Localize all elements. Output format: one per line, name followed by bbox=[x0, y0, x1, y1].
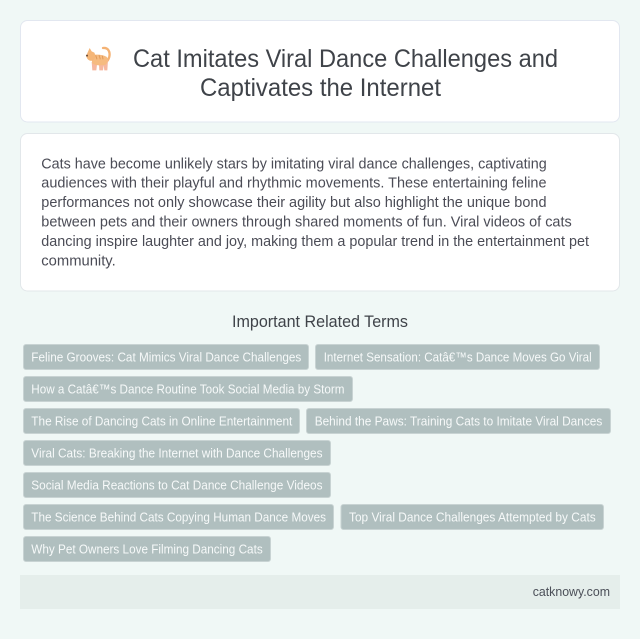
tag: The Science Behind Cats Copying Human Dance Moves bbox=[31, 510, 326, 524]
tag bbox=[24, 472, 330, 498]
description text: performances not only showcase their agility but also highlight the unique bond bbox=[41, 195, 547, 211]
tag: Social Media Reactions to Cat Dance Challenge Videos bbox=[31, 478, 323, 492]
tag: Internet Sensation: Catâ€™s Dance Moves Go Viral bbox=[324, 350, 592, 364]
panel: title card bbox=[20, 20, 620, 122]
tag bbox=[24, 344, 308, 370]
tag bbox=[24, 376, 352, 402]
tag bbox=[341, 504, 604, 530]
description text bbox=[41, 156, 589, 269]
tag: Why Pet Owners Love Filming Dancing Cats bbox=[31, 542, 263, 556]
tag: Viral Cats: Breaking the Internet with Dance Challenges bbox=[31, 446, 323, 460]
tag: Top Viral Dance Challenges Attempted by Cats bbox=[349, 510, 596, 524]
tag: The Rise of Dancing Cats in Online Entertainment bbox=[31, 414, 293, 428]
tag: How a Catâ€™s Dance Routine Took Social Media by Storm bbox=[31, 382, 345, 396]
footer bbox=[20, 575, 620, 609]
tag bbox=[24, 536, 270, 562]
description text: community. bbox=[41, 253, 116, 269]
title line 2: Captivates the Internet bbox=[200, 74, 441, 102]
heading: related terms: Important Related Terms bbox=[232, 313, 408, 331]
tag bbox=[316, 344, 600, 370]
description text: dancing inspire laughter and joy, making them a popular trend in the entertainment pet bbox=[41, 234, 589, 250]
panel: description bbox=[20, 134, 620, 291]
tag: Feline Grooves: Cat Mimics Viral Dance Challenges bbox=[31, 350, 302, 364]
tag bbox=[24, 504, 334, 530]
description text: Cats have become unlikely stars by imitating viral dance challenges, captivating bbox=[41, 156, 547, 172]
title line 1: Cat Imitates Viral Dance Challenges and bbox=[133, 45, 558, 73]
tag bbox=[24, 408, 300, 434]
icon: cat bbox=[86, 48, 110, 70]
tag bbox=[306, 408, 610, 434]
tag bbox=[24, 440, 330, 466]
description text: audiences with their playful and rhythmic movements. These entertaining feline bbox=[41, 176, 547, 192]
description text: between pets and their owners through shared moments of fun. Viral videos of cats bbox=[41, 215, 572, 231]
footer source text: catknowy.com bbox=[533, 584, 610, 599]
tag: Behind the Paws: Training Cats to Imitate Viral Dances bbox=[315, 414, 603, 428]
panel: related terms tags bbox=[24, 344, 610, 562]
